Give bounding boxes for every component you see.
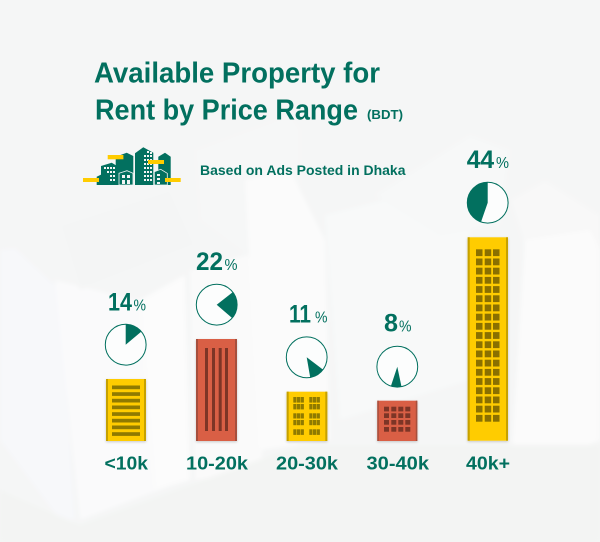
column: 20-30k, 11% — [276, 301, 339, 473]
building bar: under 10k — [106, 379, 146, 441]
value: 44%: 44 — [467, 146, 494, 174]
value: 8% — [384, 310, 412, 338]
pie: 44% — [467, 182, 508, 223]
pie: 8% — [377, 346, 418, 387]
column: 30-40k, 8% — [366, 310, 430, 473]
value: 22% — [196, 248, 238, 276]
value: 11%: % — [315, 310, 328, 327]
value: 8%: 8 — [384, 310, 398, 338]
value: 44% — [467, 146, 509, 174]
title — [94, 58, 403, 126]
value: 11%: 11 — [289, 301, 311, 329]
column: 10-20k, 22% — [186, 248, 249, 473]
icon: city skyline — [83, 147, 181, 185]
label: 10-20k: 10-20k — [186, 452, 249, 473]
label: 20-30k: 20-30k — [276, 452, 339, 473]
value: 44%: % — [496, 155, 509, 172]
title: (BDT) — [367, 107, 403, 122]
label: 30-40k: 30-40k — [366, 452, 430, 473]
value: 14%: % — [134, 298, 146, 315]
label: under 10k: <10k — [104, 452, 149, 473]
pie: 14% — [105, 324, 146, 365]
title: Rent by Price Range — [95, 94, 358, 126]
value: 11% — [289, 301, 328, 329]
value: 22%: % — [224, 257, 238, 274]
building bar: 10-20k — [196, 339, 237, 441]
pie: 22% — [196, 284, 237, 325]
column: under 10k, 14% — [104, 289, 149, 473]
subtitle: Based on Ads Posted in Dhaka — [200, 163, 406, 178]
value: 8%: % — [399, 319, 412, 336]
value: 14%: 14 — [108, 289, 132, 317]
column: 40k+, 44% — [466, 146, 510, 473]
label: 40k+: 40k+ — [466, 452, 510, 473]
title: Available Property for — [94, 58, 380, 90]
building bar: 30-40k — [377, 401, 417, 441]
building bar: 20-30k — [287, 392, 327, 441]
pie: 11% — [286, 337, 327, 378]
building bar: 40k+ — [468, 237, 508, 441]
value: 22%: 22 — [196, 248, 223, 276]
